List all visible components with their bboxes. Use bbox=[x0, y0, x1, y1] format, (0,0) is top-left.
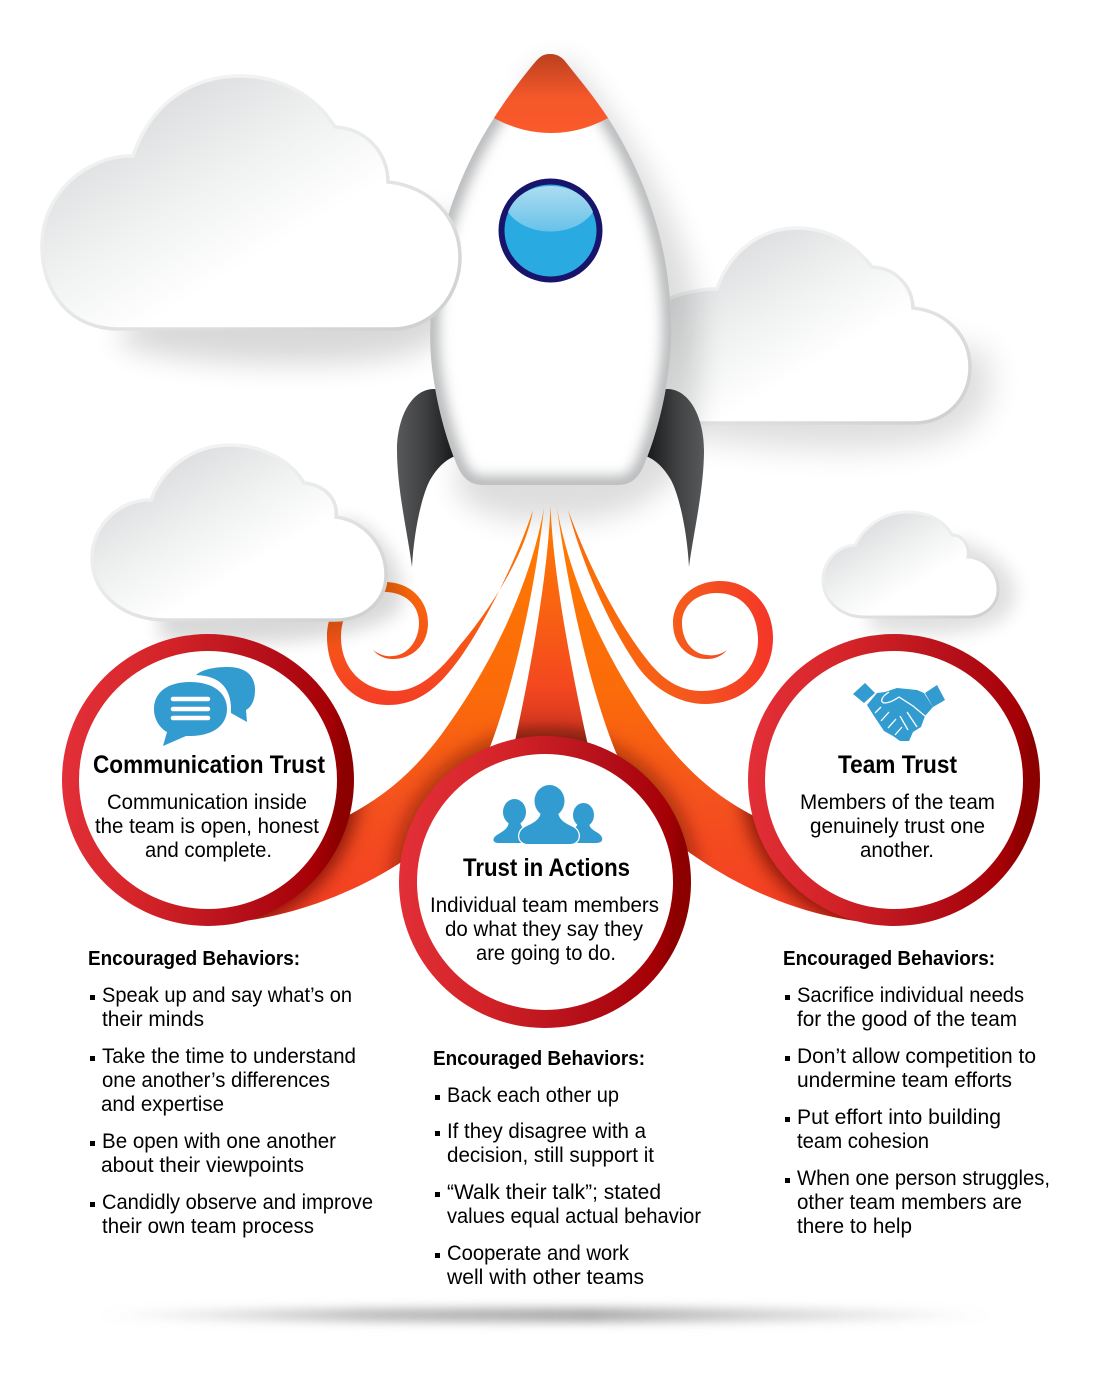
rocket exhaust bbox=[246, 506, 858, 922]
bullet list: their minds bbox=[102, 1008, 204, 1031]
text block: center behaviors bbox=[433, 1048, 701, 1289]
circle ring bbox=[748, 634, 1040, 926]
rocket nose bbox=[494, 54, 608, 133]
rocket body bbox=[425, 50, 677, 490]
heading: Encouraged Behaviors: bbox=[433, 1048, 645, 1070]
panel: Team Trust circle bbox=[748, 634, 1040, 926]
description bbox=[430, 894, 659, 965]
rocket bbox=[397, 50, 704, 567]
heading: Encouraged Behaviors: bbox=[783, 948, 995, 970]
circle ring bbox=[399, 736, 691, 1028]
text block: right behaviors bbox=[783, 948, 1050, 1238]
cloud: lower right bbox=[823, 512, 1016, 635]
bullet list: about their viewpoints bbox=[101, 1154, 304, 1177]
description: are going to do. bbox=[476, 942, 616, 965]
bullet list: and expertise bbox=[101, 1093, 224, 1116]
bullet list: Put effort into building bbox=[797, 1106, 1001, 1129]
bullet list: If they disagree with a bbox=[447, 1120, 646, 1143]
bullet list: well with other teams bbox=[446, 1266, 644, 1289]
bullet list: Speak up and say what’s on bbox=[102, 984, 352, 1007]
bullet list: their own team process bbox=[102, 1215, 314, 1238]
exhaust swirl: right bbox=[568, 510, 773, 704]
rocket shadow bbox=[455, 60, 699, 521]
heading: Communication Trust bbox=[93, 751, 326, 779]
bullet list: Candidly observe and improve bbox=[102, 1191, 373, 1214]
panel: Communication Trust circle bbox=[62, 634, 354, 926]
bullet list: decision, still support it bbox=[447, 1144, 654, 1167]
cloud: upper left bbox=[42, 76, 460, 329]
heading: Trust in Actions bbox=[463, 854, 630, 882]
bullet list: Take the time to understand bbox=[102, 1045, 356, 1068]
description: and complete. bbox=[145, 839, 272, 862]
bullet list bbox=[435, 1084, 701, 1289]
description: do what they say they bbox=[445, 918, 643, 941]
bullet list bbox=[785, 984, 1050, 1238]
text block: left behaviors bbox=[88, 948, 373, 1238]
bullet list: there to help bbox=[797, 1215, 912, 1238]
exhaust ribbon: left bbox=[215, 508, 544, 924]
bullet list: for the good of the team bbox=[797, 1008, 1017, 1031]
description: genuinely trust one bbox=[810, 815, 985, 838]
heading: Encouraged Behaviors: bbox=[88, 948, 300, 970]
icon: handshake bbox=[853, 683, 945, 741]
cloud: lower left bbox=[92, 445, 402, 644]
icon: chat bubbles bbox=[154, 667, 255, 746]
right fin bbox=[646, 389, 704, 567]
cloud: upper left shadow bbox=[120, 200, 473, 364]
bullet list: Cooperate and work bbox=[447, 1242, 629, 1265]
bullet list: undermine team efforts bbox=[797, 1069, 1012, 1092]
bullet list: Be open with one another bbox=[102, 1130, 336, 1153]
left fin bbox=[397, 389, 455, 567]
panel: Trust in Actions circle bbox=[399, 736, 691, 1028]
bullet list: Don’t allow competition to bbox=[797, 1045, 1036, 1068]
ground shadow bbox=[95, 1308, 995, 1322]
bullet list: “Walk their talk”; stated bbox=[447, 1181, 661, 1204]
bullet list: Back each other up bbox=[447, 1084, 619, 1107]
exhaust ribbon: center bbox=[513, 506, 589, 750]
description bbox=[800, 791, 995, 862]
cloud: upper right bbox=[640, 228, 991, 449]
rocket window bbox=[498, 178, 602, 282]
exhaust swirl: left bbox=[327, 510, 533, 705]
bullet list: other team members are bbox=[797, 1191, 1022, 1214]
bullet list bbox=[90, 984, 373, 1238]
bullet list: When one person struggles, bbox=[797, 1167, 1050, 1190]
description: Individual team members bbox=[430, 894, 659, 917]
bullet list: values equal actual behavior bbox=[447, 1205, 701, 1228]
bullet list: one another’s differences bbox=[102, 1069, 330, 1092]
bullet list: Sacrifice individual needs bbox=[797, 984, 1024, 1007]
heading: Team Trust bbox=[838, 751, 958, 779]
circle ring bbox=[62, 634, 354, 926]
description: Communication inside bbox=[107, 791, 307, 814]
bullet list: team cohesion bbox=[797, 1130, 929, 1153]
description: another. bbox=[860, 839, 934, 862]
description bbox=[95, 791, 319, 862]
circle shadows on ribbons bbox=[246, 720, 858, 922]
description: the team is open, honest bbox=[95, 815, 319, 838]
icon: people bbox=[493, 785, 602, 844]
exhaust ribbon: right bbox=[557, 508, 885, 924]
description: Members of the team bbox=[800, 791, 995, 814]
